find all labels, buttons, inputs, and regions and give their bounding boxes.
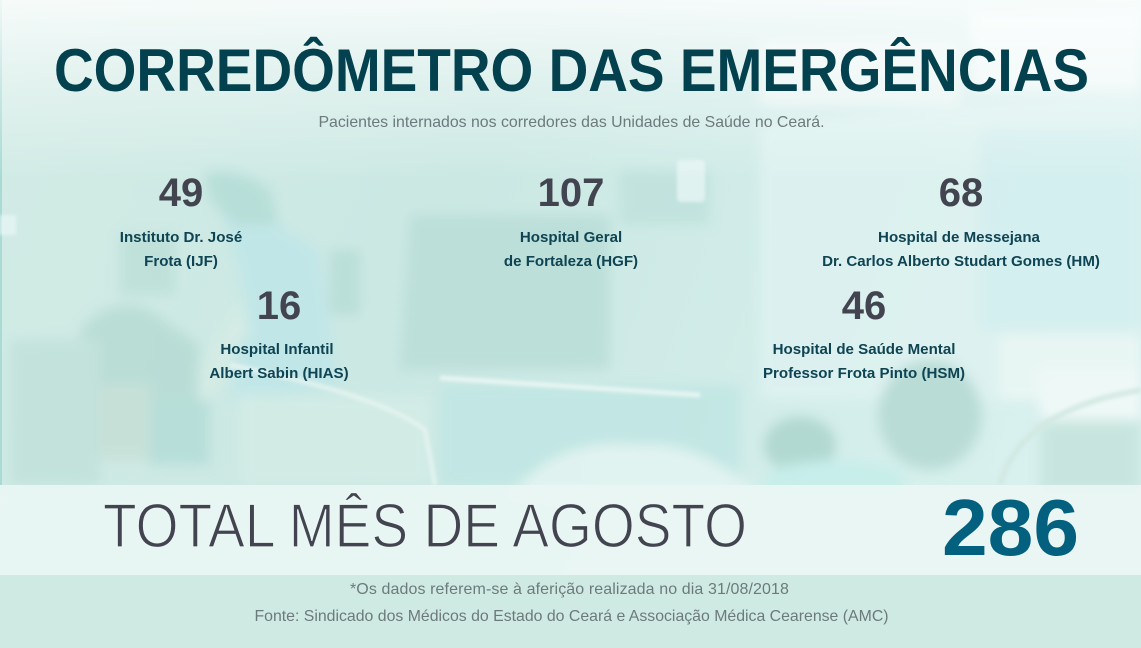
stat: HGF: de Fortaleza (HGF) xyxy=(504,253,638,270)
stat: HM label: Hospital de Messejana xyxy=(878,229,1040,246)
monitor xyxy=(400,215,610,370)
stat: HIAS: 16 xyxy=(257,284,301,328)
stat: HM number: 68 xyxy=(939,171,983,215)
source: Fonte: Sindicado dos Médicos do Estado do Ceará e Associação Médica Cearense (AMC) xyxy=(254,608,889,625)
right bright wall xyxy=(760,40,960,105)
stat: HGF: Hospital Geral xyxy=(520,229,622,246)
woman xyxy=(205,169,340,400)
stat: HSM: 46 xyxy=(842,284,886,328)
IV bag xyxy=(677,160,705,202)
stat: HIAS xyxy=(209,284,349,382)
stat: HM label xyxy=(822,229,1100,270)
stat: IJF: 49 xyxy=(159,171,203,215)
total label: TOTAL MÊS DE AGOSTO xyxy=(103,492,747,561)
lower strip below band xyxy=(0,575,1141,648)
wall panel xyxy=(120,235,175,295)
footnote: *Os dados referem-se à aferição realizada no dia 31/08/2018 xyxy=(350,581,789,598)
bed rail xyxy=(440,378,700,395)
stat: IJF xyxy=(120,171,242,270)
seated patient dark area xyxy=(80,306,200,460)
stat: HSM: Professor Frota Pinto (HSM) xyxy=(763,365,965,382)
stat: HGF: 107 xyxy=(538,171,604,215)
stat: IJF: Instituto Dr. José xyxy=(120,229,242,246)
stat: HIAS: Hospital Infantil xyxy=(220,341,334,358)
stat: HSM: Hospital de Saúde Mental xyxy=(773,341,955,358)
total value: 286 xyxy=(942,483,1079,572)
subtitle: Pacientes internados nos corredores das Unidades de Saúde no Ceará. xyxy=(318,114,825,131)
stat: IJF: Frota (IJF) xyxy=(144,253,218,270)
bed xyxy=(240,395,430,485)
stat: HIAS: Albert Sabin (HIAS) xyxy=(209,365,349,382)
total band xyxy=(0,485,1141,575)
stat: HM label: Dr. Carlos Alberto Studart Gomes (HM) xyxy=(822,253,1100,270)
stat: HSM xyxy=(763,284,965,382)
stat: HGF xyxy=(504,171,638,270)
